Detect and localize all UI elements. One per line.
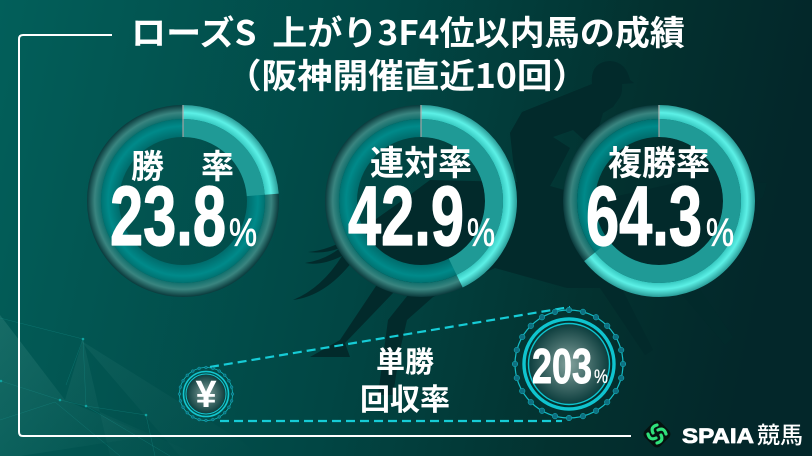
title xyxy=(131,6,685,98)
value: 64.3%: 64.3 xyxy=(586,169,702,263)
value: 64.3%: % xyxy=(706,212,734,255)
decorative light polygons xyxy=(0,315,260,456)
donut: win rate 23.8% xyxy=(94,105,272,290)
value: 42.9%: 42.9 xyxy=(348,169,464,263)
badge: 203% xyxy=(512,307,626,421)
frame line xyxy=(19,35,631,436)
value: 42.9%: % xyxy=(467,212,495,255)
label: top-3 rate: 複勝率 xyxy=(608,136,710,185)
badge: 203%: 203 xyxy=(532,340,592,394)
label: win return rate: 単勝 xyxy=(376,339,434,381)
icon: yen coin: ¥ xyxy=(195,374,217,416)
title: （阪神開催直近10回） xyxy=(226,49,588,98)
donut: top-2 rate 42.9% xyxy=(332,105,510,290)
label: win rate: 勝 xyxy=(131,140,164,188)
logo: SPAIA keiba: 競馬 xyxy=(757,416,803,450)
donut: top-3 rate 64.3% xyxy=(570,105,748,290)
value: 23.8%: % xyxy=(229,212,257,255)
logo: SPAIA keiba: SPAIA xyxy=(682,425,754,448)
title: ローズS 上がり3F4位以内馬の成績 xyxy=(131,6,685,55)
value: 23.8%: 23.8 xyxy=(110,169,226,263)
label: top-2 rate: 連対率 xyxy=(370,136,472,185)
dashed connector lines xyxy=(210,307,570,421)
badge: 203%: % xyxy=(594,367,608,388)
label: win rate: 率 xyxy=(201,140,234,188)
label: win return rate xyxy=(360,339,450,419)
logo: SPAIA keiba xyxy=(641,416,803,450)
icon: yen coin xyxy=(178,366,234,422)
jockey and horse silhouette xyxy=(293,61,767,395)
label: win return rate: 回収率 xyxy=(360,375,450,419)
label: win rate xyxy=(131,140,234,188)
